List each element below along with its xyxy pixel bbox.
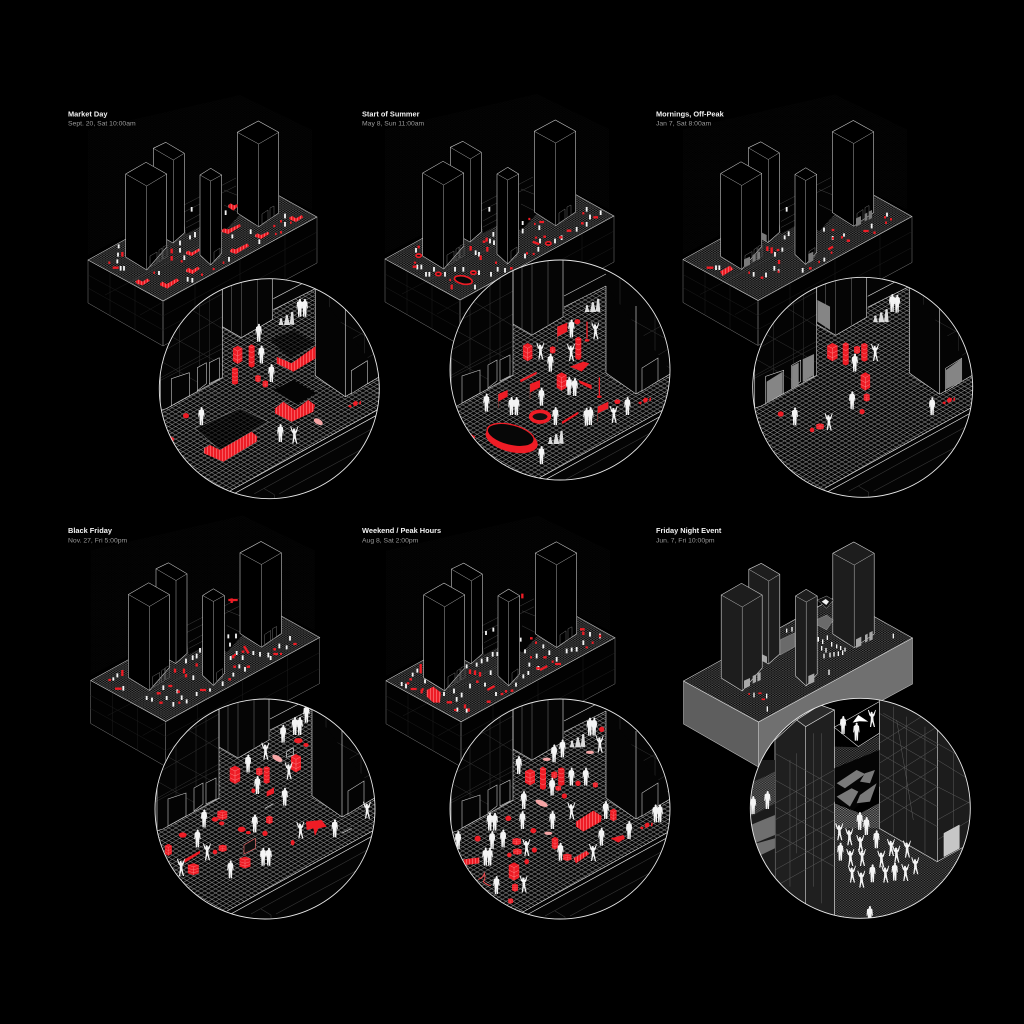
inset circle: summer pop-ups detail (450, 260, 670, 480)
heading: Friday Night Event (656, 526, 722, 544)
heading: Friday Night Event: Jun. 7, Fri 10:00pm (656, 538, 715, 544)
panel: Black Friday (68, 528, 376, 920)
grey doors (767, 300, 962, 403)
heading: Start of Summer: Start of Summer (362, 110, 420, 118)
heading: Start of Summer: May 8, Sun 11:00am (362, 120, 425, 128)
panel: Friday Night Event (656, 526, 973, 924)
heading: Black Friday: Black Friday (68, 526, 113, 535)
visitors (455, 718, 663, 894)
inset circle: market stalls detail (158, 278, 380, 500)
left tower (747, 705, 834, 923)
kiosks and benches (463, 727, 653, 904)
isometric massing with market stalls (88, 95, 317, 346)
heading: Mornings, Off-Peak (656, 110, 725, 128)
heading: Market Day: Sept. 20, Sat 10:00am (68, 120, 136, 128)
heading: Mornings, Off-Peak: Mornings, Off-Peak (656, 110, 725, 118)
visitors (792, 294, 935, 430)
right tower (879, 693, 973, 862)
isometric massing with sparse activity (683, 94, 912, 346)
heading: Weekend / Peak Hours (362, 526, 441, 544)
heading: Market Day (68, 110, 136, 128)
isometric massing with shopping crowd (91, 516, 320, 766)
heading: Weekend / Peak Hours: Weekend / Peak Hours (362, 526, 441, 535)
isometric massing with weekend crowd (386, 516, 615, 767)
shoppers (177, 705, 371, 878)
kiosks and banners (470, 319, 651, 441)
market stalls (204, 346, 316, 462)
sunken pits (195, 330, 317, 450)
event stage (834, 702, 879, 747)
panel: Start of Summer (362, 111, 670, 480)
heading: Black Friday: Nov. 27, Fri 5:00pm (68, 538, 128, 544)
kiosks (778, 342, 955, 432)
panel: Mornings, Off-Peak (656, 111, 974, 498)
white door (944, 825, 959, 857)
panel: Market Day (68, 111, 380, 500)
inset circle: night event crowd detail (747, 693, 973, 924)
heading: Mornings, Off-Peak: Jan 7, Sat 8:00am (656, 120, 712, 128)
isometric massing with summer pop-ups (385, 94, 614, 345)
heading: Friday Night Event: Friday Night Event (656, 526, 722, 535)
crowd plaza floor (834, 804, 962, 918)
wireframe lines (775, 707, 970, 903)
heading: Start of Summer (362, 110, 425, 128)
kiosks and gifts (165, 738, 352, 875)
inset circle: off-peak detail (752, 276, 974, 498)
small red ring (531, 411, 549, 422)
inset circle: weekend crowd detail (450, 698, 670, 920)
heading: Weekend / Peak Hours: Aug 8, Sat 2:00pm (362, 538, 419, 544)
dancers (750, 791, 919, 924)
skylights (834, 750, 879, 810)
heading: Black Friday (68, 526, 128, 544)
visitors (198, 299, 308, 444)
visitors (483, 299, 631, 464)
isometric massing lit for night event (684, 542, 912, 767)
inset circle: shopping crowd detail (154, 698, 376, 920)
large red ring bench (486, 422, 538, 454)
heading: Market Day: Market Day (68, 110, 108, 118)
panel: Weekend / Peak Hours (362, 528, 670, 920)
